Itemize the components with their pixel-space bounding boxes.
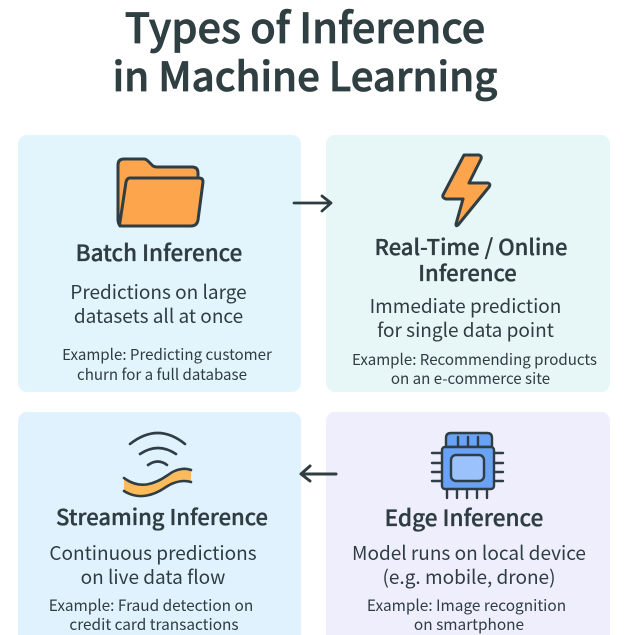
arrow: left <box>299 464 338 483</box>
text: edge description: (e.g. mobile, drone) <box>382 563 556 590</box>
text: streaming example: Example: Fraud detection on <box>49 594 253 616</box>
text: real-time description <box>370 292 561 343</box>
icon: wave and signal <box>122 432 192 498</box>
panel: batch inference <box>18 135 301 392</box>
text: real-time example: on an e-commerce site <box>391 367 550 389</box>
text: streaming description <box>49 539 257 590</box>
heading: real-time inference: Inference <box>418 256 517 288</box>
text: batch description <box>70 278 247 329</box>
heading: streaming inference: Streaming Inference <box>56 500 268 532</box>
text: edge example: on smartphone <box>414 613 524 635</box>
text: edge example <box>367 594 566 635</box>
heading: edge inference: Edge Inference <box>385 501 543 533</box>
text: real-time description: Immediate prediction <box>370 292 561 319</box>
text: streaming description: on live data flow <box>81 563 225 590</box>
arrow: right <box>292 194 332 212</box>
text: real-time description: for single data point <box>377 316 554 343</box>
icon: lightning bolt <box>441 154 492 228</box>
text: streaming example: credit card transactions <box>69 613 239 635</box>
text: edge description <box>352 539 586 590</box>
text: batch description: Predictions on large <box>70 278 247 305</box>
text: real-time example: Example: Recommending products <box>352 348 597 370</box>
icon: folder <box>116 158 204 228</box>
panel: edge inference <box>326 412 610 635</box>
text: real-time example <box>352 348 597 389</box>
panel: real-time inference <box>326 135 610 392</box>
text: edge description: Model runs on local device <box>352 539 586 566</box>
text: edge example: Example: Image recognition <box>367 594 566 616</box>
title: in Machine Learning <box>113 44 497 103</box>
text: streaming description: Continuous predictions <box>49 539 257 566</box>
text: batch description: datasets all at once <box>74 302 243 329</box>
icon: chip <box>430 432 504 500</box>
heading: real-time inference: Real-Time / Online <box>374 230 568 262</box>
text: streaming example <box>49 594 253 635</box>
text: batch example: churn for a full database <box>77 363 247 385</box>
panel: streaming inference <box>18 412 301 635</box>
text: batch example <box>62 343 272 385</box>
title <box>113 0 498 103</box>
text: batch example: Example: Predicting customer <box>62 343 272 365</box>
heading: real-time inference <box>374 230 568 288</box>
heading: batch inference: Batch Inference <box>76 236 242 268</box>
